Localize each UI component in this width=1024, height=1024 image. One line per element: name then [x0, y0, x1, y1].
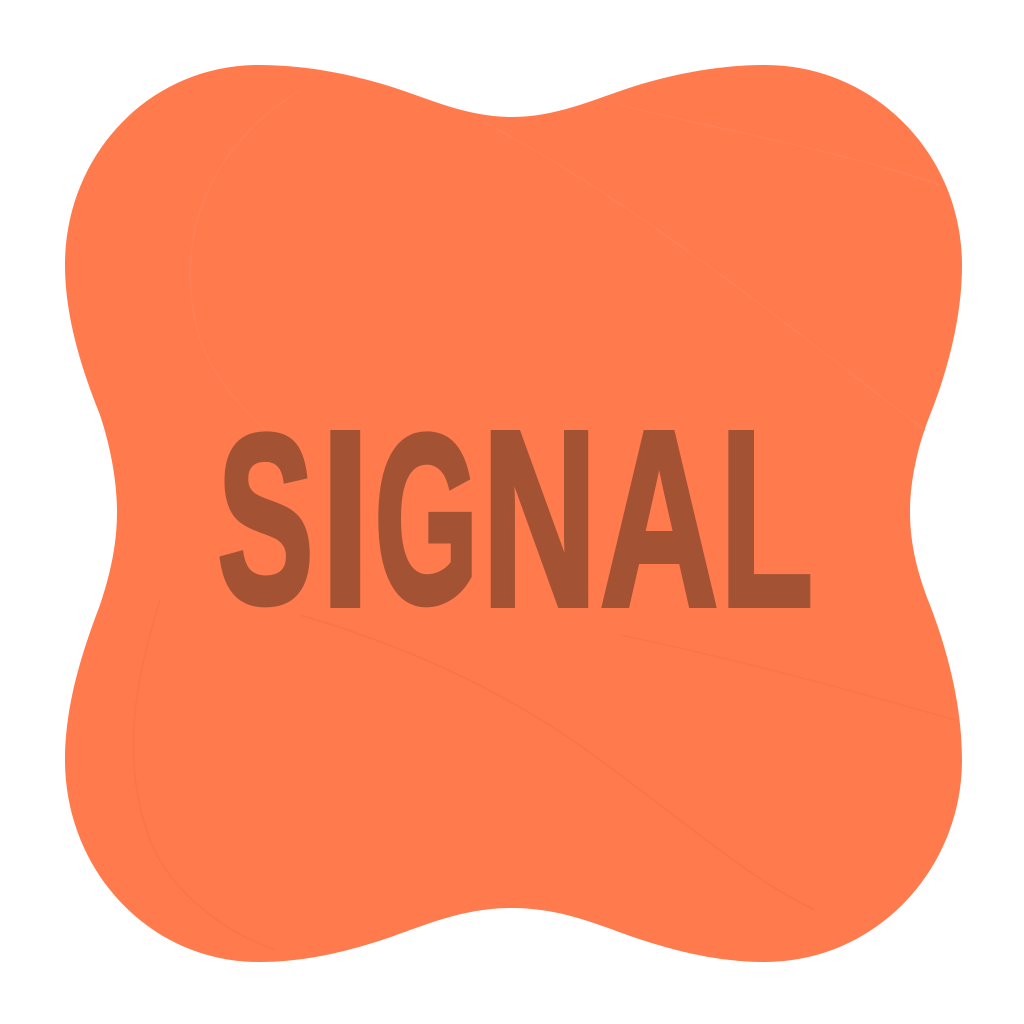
letter I: I	[321, 379, 370, 658]
faint texture streaks	[133, 90, 955, 950]
letter A: A	[600, 379, 718, 658]
letter G: G	[374, 386, 478, 654]
blob: orange four-lobed background shape	[65, 65, 962, 962]
letter N: N	[482, 380, 597, 659]
letter S: S	[218, 385, 314, 653]
letter L: L	[720, 379, 813, 658]
title: SIGNAL wordmark	[218, 379, 813, 659]
